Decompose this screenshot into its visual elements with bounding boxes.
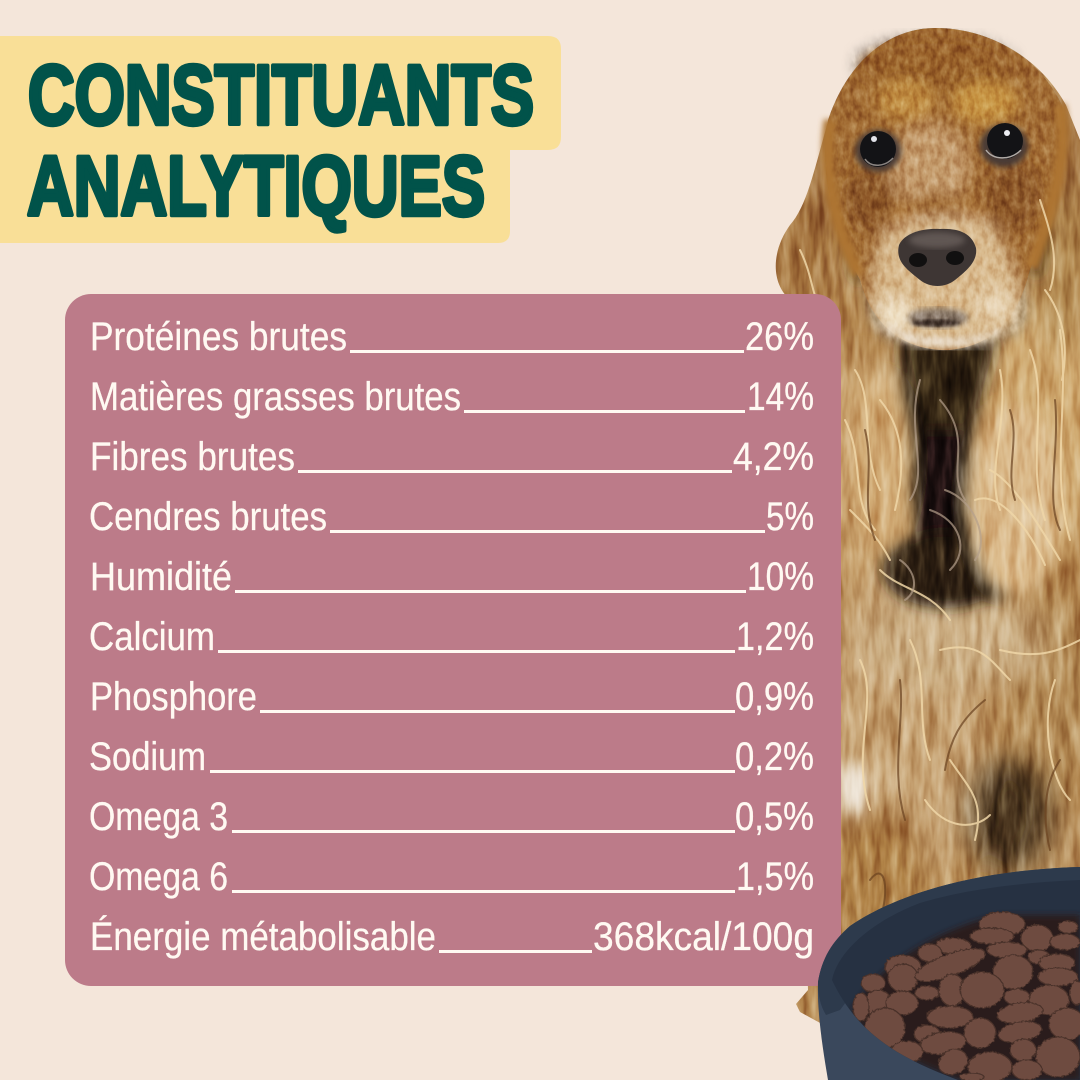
row: énergie métabolisable: 368kcal/100g — [593, 915, 814, 959]
panel: analytical constituents table — [65, 294, 841, 986]
row: fibres brutes — [90, 435, 814, 479]
row: sodium: 0,2% — [735, 735, 814, 779]
row: calcium — [89, 615, 814, 659]
row: énergie métabolisable — [90, 914, 814, 959]
row: phosphore — [90, 675, 814, 719]
row: matières grasses brutes: Matières grasses brutes — [90, 375, 461, 419]
row: cendres brutes — [89, 495, 814, 539]
row: omega 6: 1,5% — [736, 855, 814, 899]
title background highlight — [0, 36, 561, 243]
row: omega 6: Omega 6 — [89, 855, 228, 899]
nose — [898, 229, 976, 286]
row: sodium: Sodium — [89, 735, 206, 779]
bowl rim and outer wall — [818, 867, 1080, 1080]
row: fibres brutes: Fibres brutes — [90, 435, 295, 479]
row: phosphore: 0,9% — [735, 675, 814, 719]
right eye — [980, 123, 1028, 167]
row: humidité — [90, 555, 814, 599]
title: CONSTITUANTS — [28, 48, 534, 142]
row: fibres brutes: 4,2% — [733, 435, 814, 479]
row: cendres brutes: 5% — [766, 495, 814, 539]
row: cendres brutes: Cendres brutes — [89, 495, 327, 539]
row: humidité: 10% — [747, 555, 814, 599]
title — [27, 48, 534, 233]
row: omega 3 — [89, 795, 814, 839]
food bowl with kibble — [818, 867, 1080, 1080]
dog body and fur — [760, 20, 1080, 1030]
row: matières grasses brutes — [90, 375, 814, 419]
dog head — [825, 28, 1064, 350]
row: protéines brutes — [90, 315, 814, 359]
row: énergie métabolisable: Énergie métabolisable — [90, 914, 436, 959]
row: protéines brutes: Protéines brutes — [90, 315, 347, 359]
left eye — [855, 130, 901, 172]
bowl inner — [832, 880, 1080, 1080]
row: calcium: Calcium — [89, 615, 215, 659]
head side blend into ears — [828, 105, 1063, 275]
row: humidité: Humidité — [90, 555, 232, 599]
panel background — [65, 294, 841, 986]
kibble pile — [852, 912, 1080, 1080]
row: omega 6 — [89, 855, 814, 899]
row: protéines brutes: 26% — [745, 315, 814, 359]
title: ANALYTIQUES — [27, 139, 485, 233]
bowl rim top — [818, 867, 1080, 1015]
fur strands — [800, 200, 1080, 920]
row: sodium — [89, 735, 814, 779]
row: matières grasses brutes: 14% — [747, 375, 814, 419]
row: calcium: 1,2% — [736, 615, 814, 659]
row: omega 3: 0,5% — [735, 795, 814, 839]
photo: cocker spaniel dog — [760, 20, 1080, 1030]
row: phosphore: Phosphore — [90, 675, 257, 719]
row: omega 3: Omega 3 — [89, 795, 228, 839]
